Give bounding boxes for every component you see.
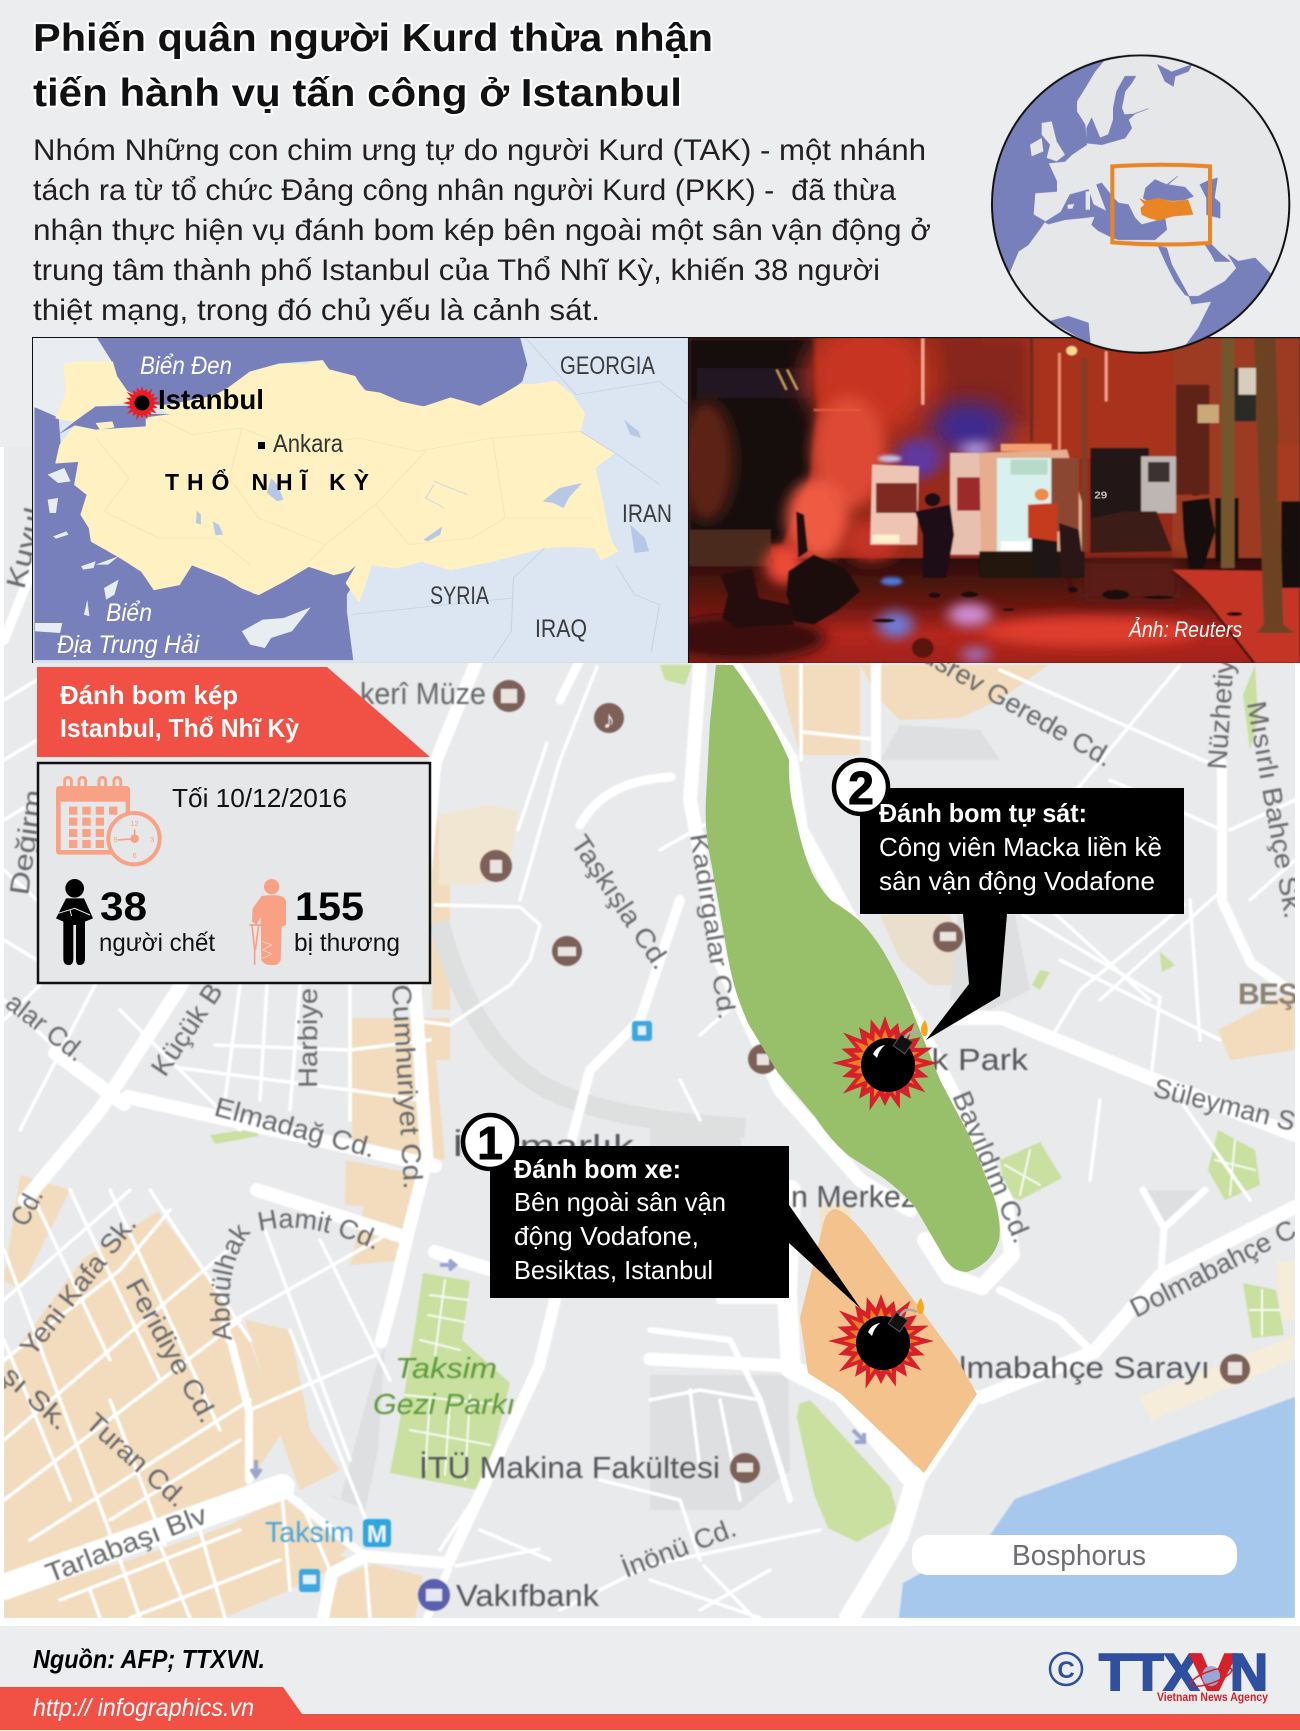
icon: calendar and clock: 6 <box>133 851 137 860</box>
intro paragraph: tách ra từ tổ chức Đảng công nhân người Kurd (PKK) - đã thừa <box>33 174 896 207</box>
photo: blast scene <box>654 321 1300 663</box>
street labels: usrev Gerede Cd. <box>917 639 1118 773</box>
street labels: Cd. <box>5 1183 49 1231</box>
header banner <box>37 667 430 757</box>
street labels: Abdülhak Hamit Cd. <box>209 1209 376 1340</box>
callout 2: suicide bombing: Công viên Macka liền kề <box>879 832 1162 862</box>
panel: location map of Turkey: IRAQ <box>535 615 587 643</box>
map POI icons: M <box>367 1521 387 1548</box>
Bosphorus label <box>912 1535 1237 1575</box>
intro paragraph: nhận thực hiện vụ đánh bom kép bên ngoài một sân vận động ở <box>33 214 931 247</box>
source line: Nguồn: AFP; TTXVN. <box>33 1644 265 1674</box>
deaths number: 38 <box>100 885 147 929</box>
footer bar with URL: http:// infographics.vn <box>33 1694 254 1722</box>
title: Phiến quân người Kurd thừa nhận <box>33 17 713 60</box>
panel: location map of Turkey: Ankara <box>273 430 343 458</box>
street labels: Nüzhetiy <box>1202 658 1240 770</box>
street labels: Bayıldım Cd. <box>946 1087 1037 1247</box>
panel: casualty summary <box>38 763 430 983</box>
callout 1: car bombing <box>463 1115 861 1309</box>
street labels: Elmadağ Cd. <box>211 1092 379 1164</box>
street labels: Feridiye Cd. <box>120 1273 224 1428</box>
street labels: alar Cd. <box>0 987 91 1067</box>
callout 2: suicide bombing: Đánh bom tự sát: <box>879 798 1087 828</box>
callout 1: car bombing: Bên ngoài sân vận <box>514 1187 726 1217</box>
panel: location map of Turkey: Biển Đen <box>140 352 232 380</box>
map POI icons <box>251 680 1250 1611</box>
injured number: 155 <box>295 885 364 929</box>
title: tiến hành vụ tấn công ở Istanbul <box>33 72 682 115</box>
street labels: Küçük B <box>145 978 229 1081</box>
street labels: Turan Cd. <box>80 1407 193 1513</box>
logo: TTXVN: C <box>1057 1657 1075 1684</box>
icon: calendar and clock: 9 <box>114 835 118 844</box>
street labels: Dolmabahçe C <box>1125 1214 1300 1323</box>
panel: location map of Turkey <box>32 337 689 663</box>
Bosphorus label: Bosphorus <box>1012 1540 1146 1572</box>
footer bar with URL <box>0 1687 1300 1730</box>
street labels: Tarlabaşı Blv <box>41 1499 211 1589</box>
date text: Tối 10/12/2016 <box>172 783 347 813</box>
street labels: kerî Müze <box>360 676 486 711</box>
street labels: BEŞ <box>1238 978 1298 1011</box>
header banner: Istanbul, Thổ Nhĩ Kỳ <box>60 713 299 743</box>
street labels: Kuyul <box>1 505 50 591</box>
callout 2: suicide bombing <box>834 760 1184 1040</box>
logo: TTXVN: N <box>1230 1644 1268 1702</box>
intro paragraph <box>33 134 931 327</box>
icon: Istanbul blast marker <box>123 386 161 420</box>
panel: location map of Turkey: Biển <box>106 599 152 627</box>
header banner: Đánh bom kép <box>60 680 238 710</box>
icon: calendar and clock <box>56 777 160 864</box>
panel: location map of Turkey: Địa Trung Hải <box>57 631 200 659</box>
title <box>33 17 713 115</box>
street labels: İ Mimarlık <box>452 1128 635 1163</box>
photo: blast scene: 29 <box>1094 490 1107 501</box>
callout 1: car bombing: Đánh bom xe: <box>514 1154 681 1184</box>
street labels: n Merkez <box>791 1179 916 1214</box>
street labels: Süleyman S <box>1151 1073 1298 1137</box>
Macka park highlight <box>706 665 1000 1272</box>
panel: location map of Turkey: IRAN <box>622 500 672 528</box>
street labels <box>4 507 1295 1608</box>
icon: bomb 1 <box>828 1294 934 1389</box>
panel: location map of Turkey: Istanbul <box>158 384 264 415</box>
intro paragraph: trung tâm thành phố Istanbul của Thổ Nhĩ Kỳ, khiến 38 người <box>33 254 880 287</box>
street labels: İTÜ Makina Fakültesi <box>419 1450 720 1485</box>
street labels: Değirm <box>4 788 49 897</box>
icon: calendar and clock: 3 <box>150 835 154 844</box>
street labels: Taksim <box>265 1517 354 1549</box>
intro paragraph: thiệt mạng, trong đó chủ yếu là cảnh sát. <box>33 294 600 327</box>
photo credit: Ảnh: Reuters <box>1127 617 1242 642</box>
street labels: Taşkışla Cd. <box>565 830 677 975</box>
panel: location map of Turkey: GEORGIA <box>560 352 655 380</box>
callout 2: suicide bombing: sân vận động Vodafone <box>879 866 1155 896</box>
street labels: Gezi Parkı <box>373 1389 515 1421</box>
inset globe locator <box>985 48 1289 360</box>
icon: calendar and clock: 12 <box>130 819 138 828</box>
deaths caption: người chết <box>99 929 215 957</box>
icon: bomb 2 <box>832 1016 938 1111</box>
street labels: Yeni Kafa Sk. <box>14 1209 142 1362</box>
street labels: İnönü Cd. <box>617 1512 740 1584</box>
street labels: lmabahçe Sarayı <box>959 1350 1210 1385</box>
callout 1: car bombing: Besiktas, Istanbul <box>514 1255 713 1285</box>
street labels: Vakıfbank <box>456 1578 600 1613</box>
callout 1: car bombing: động Vodafone, <box>514 1221 699 1251</box>
panel: location map of Turkey: THỔ NHĨ KỲ <box>165 468 369 495</box>
logo: TTXVN: TTX <box>1099 1644 1199 1702</box>
injured caption: bị thương <box>294 929 400 957</box>
icon: deceased person <box>56 879 93 965</box>
street labels: Taksim <box>395 1353 497 1385</box>
logo: TTXVN: Vietnam News Agency <box>1157 1690 1268 1704</box>
street labels: Harbiye <box>293 988 323 1088</box>
stadium highlight <box>800 1209 977 1473</box>
callout 2: suicide bombing: 2 <box>848 762 874 814</box>
logo: TTXVN: V <box>1190 1644 1236 1702</box>
icon: injured person <box>249 879 286 965</box>
panel: location map of Turkey: SYRIA <box>430 582 489 610</box>
map POI icons: ♪ <box>603 707 615 734</box>
intro paragraph: Nhóm Những con chim ưng tự do người Kurd (TAK) - một nhánh <box>33 134 926 167</box>
street labels: Cumhuriyet Cd. <box>386 984 428 1190</box>
callout 1: car bombing: 1 <box>477 1117 503 1169</box>
logo: TTXVN <box>1050 1644 1268 1704</box>
street labels: ik Park <box>924 1042 1029 1077</box>
street map background <box>0 447 1300 1626</box>
street labels: Kadırgalar Cd. <box>684 832 741 1022</box>
